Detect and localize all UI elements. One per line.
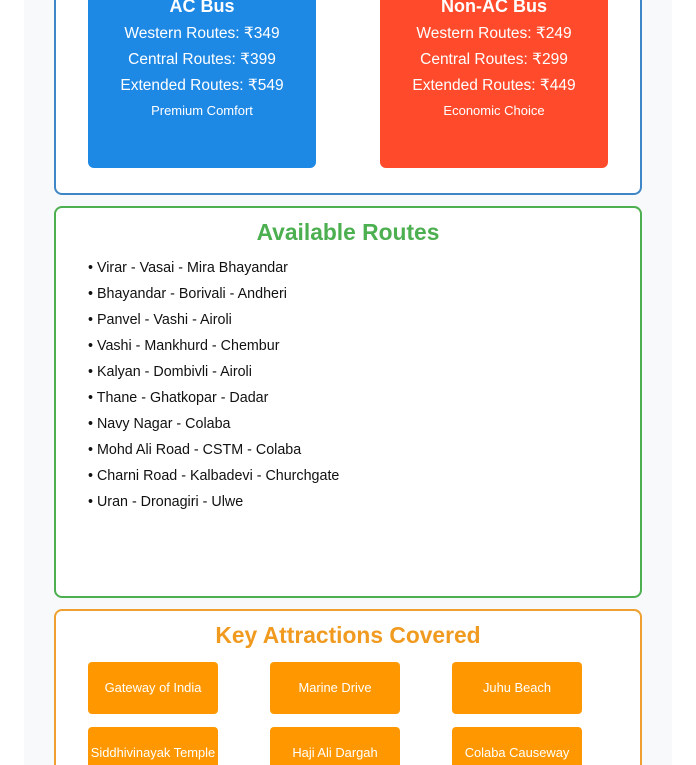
- route 10: • Uran - Dronagiri - Ulwe: [88, 494, 243, 510]
- route 2: • Bhayandar - Borivali - Andheri: [88, 286, 287, 302]
- route 7: • Navy Nagar - Colaba: [88, 416, 230, 432]
- chip: Siddhivinayak Temple: Siddhivinayak Temple: [91, 745, 215, 760]
- route 3: • Panvel - Vashi - Airoli: [88, 312, 232, 328]
- chip: Colaba Causeway: [452, 727, 582, 765]
- route 9: • Charni Road - Kalbadevi - Churchgate: [88, 468, 339, 484]
- chip: Haji Ali Dargah: Haji Ali Dargah: [292, 745, 378, 760]
- AC note: Premium Comfort: [151, 103, 253, 118]
- route list: [88, 260, 339, 510]
- card: Non-AC bus: [380, 0, 608, 168]
- AC extended fare: Extended Routes: ₹549: [120, 77, 284, 94]
- AC western fare: Western Routes: ₹349: [124, 25, 280, 42]
- chip: Marine Drive: Marine Drive: [298, 680, 372, 695]
- route 8: • Mohd Ali Road - CSTM - Colaba: [88, 442, 301, 458]
- chip: Colaba Causeway: Colaba Causeway: [465, 745, 569, 760]
- attractions heading: Key Attractions Covered: [215, 622, 481, 648]
- chip: Gateway of India: Gateway of India: [105, 680, 201, 695]
- panel: bus fares: [54, 0, 642, 195]
- panel: available routes: [54, 206, 642, 598]
- chip: Marine Drive: [270, 662, 400, 714]
- panel: key attractions: [54, 609, 642, 765]
- chip: Haji Ali Dargah: [270, 727, 400, 765]
- AC central fare: Central Routes: ₹399: [128, 51, 276, 68]
- Non-AC western fare: Western Routes: ₹249: [416, 25, 572, 42]
- Non-AC central fare: Central Routes: ₹299: [420, 51, 568, 68]
- chip: Juhu Beach: [452, 662, 582, 714]
- route 6: • Thane - Ghatkopar - Dadar: [88, 390, 268, 406]
- card: AC bus: [88, 0, 316, 168]
- chip: Gateway of India: [88, 662, 218, 714]
- route 1: • Virar - Vasai - Mira Bhayandar: [88, 260, 288, 276]
- Non-AC note: Economic Choice: [443, 103, 545, 118]
- chip: Juhu Beach: Juhu Beach: [483, 680, 551, 695]
- chip: Siddhivinayak Temple: [88, 727, 218, 765]
- route 4: • Vashi - Mankhurd - Chembur: [88, 338, 279, 354]
- routes heading: Available Routes: [257, 219, 439, 245]
- route 5: • Kalyan - Dombivli - Airoli: [88, 364, 252, 380]
- Non-AC extended fare: Extended Routes: ₹449: [412, 77, 576, 94]
